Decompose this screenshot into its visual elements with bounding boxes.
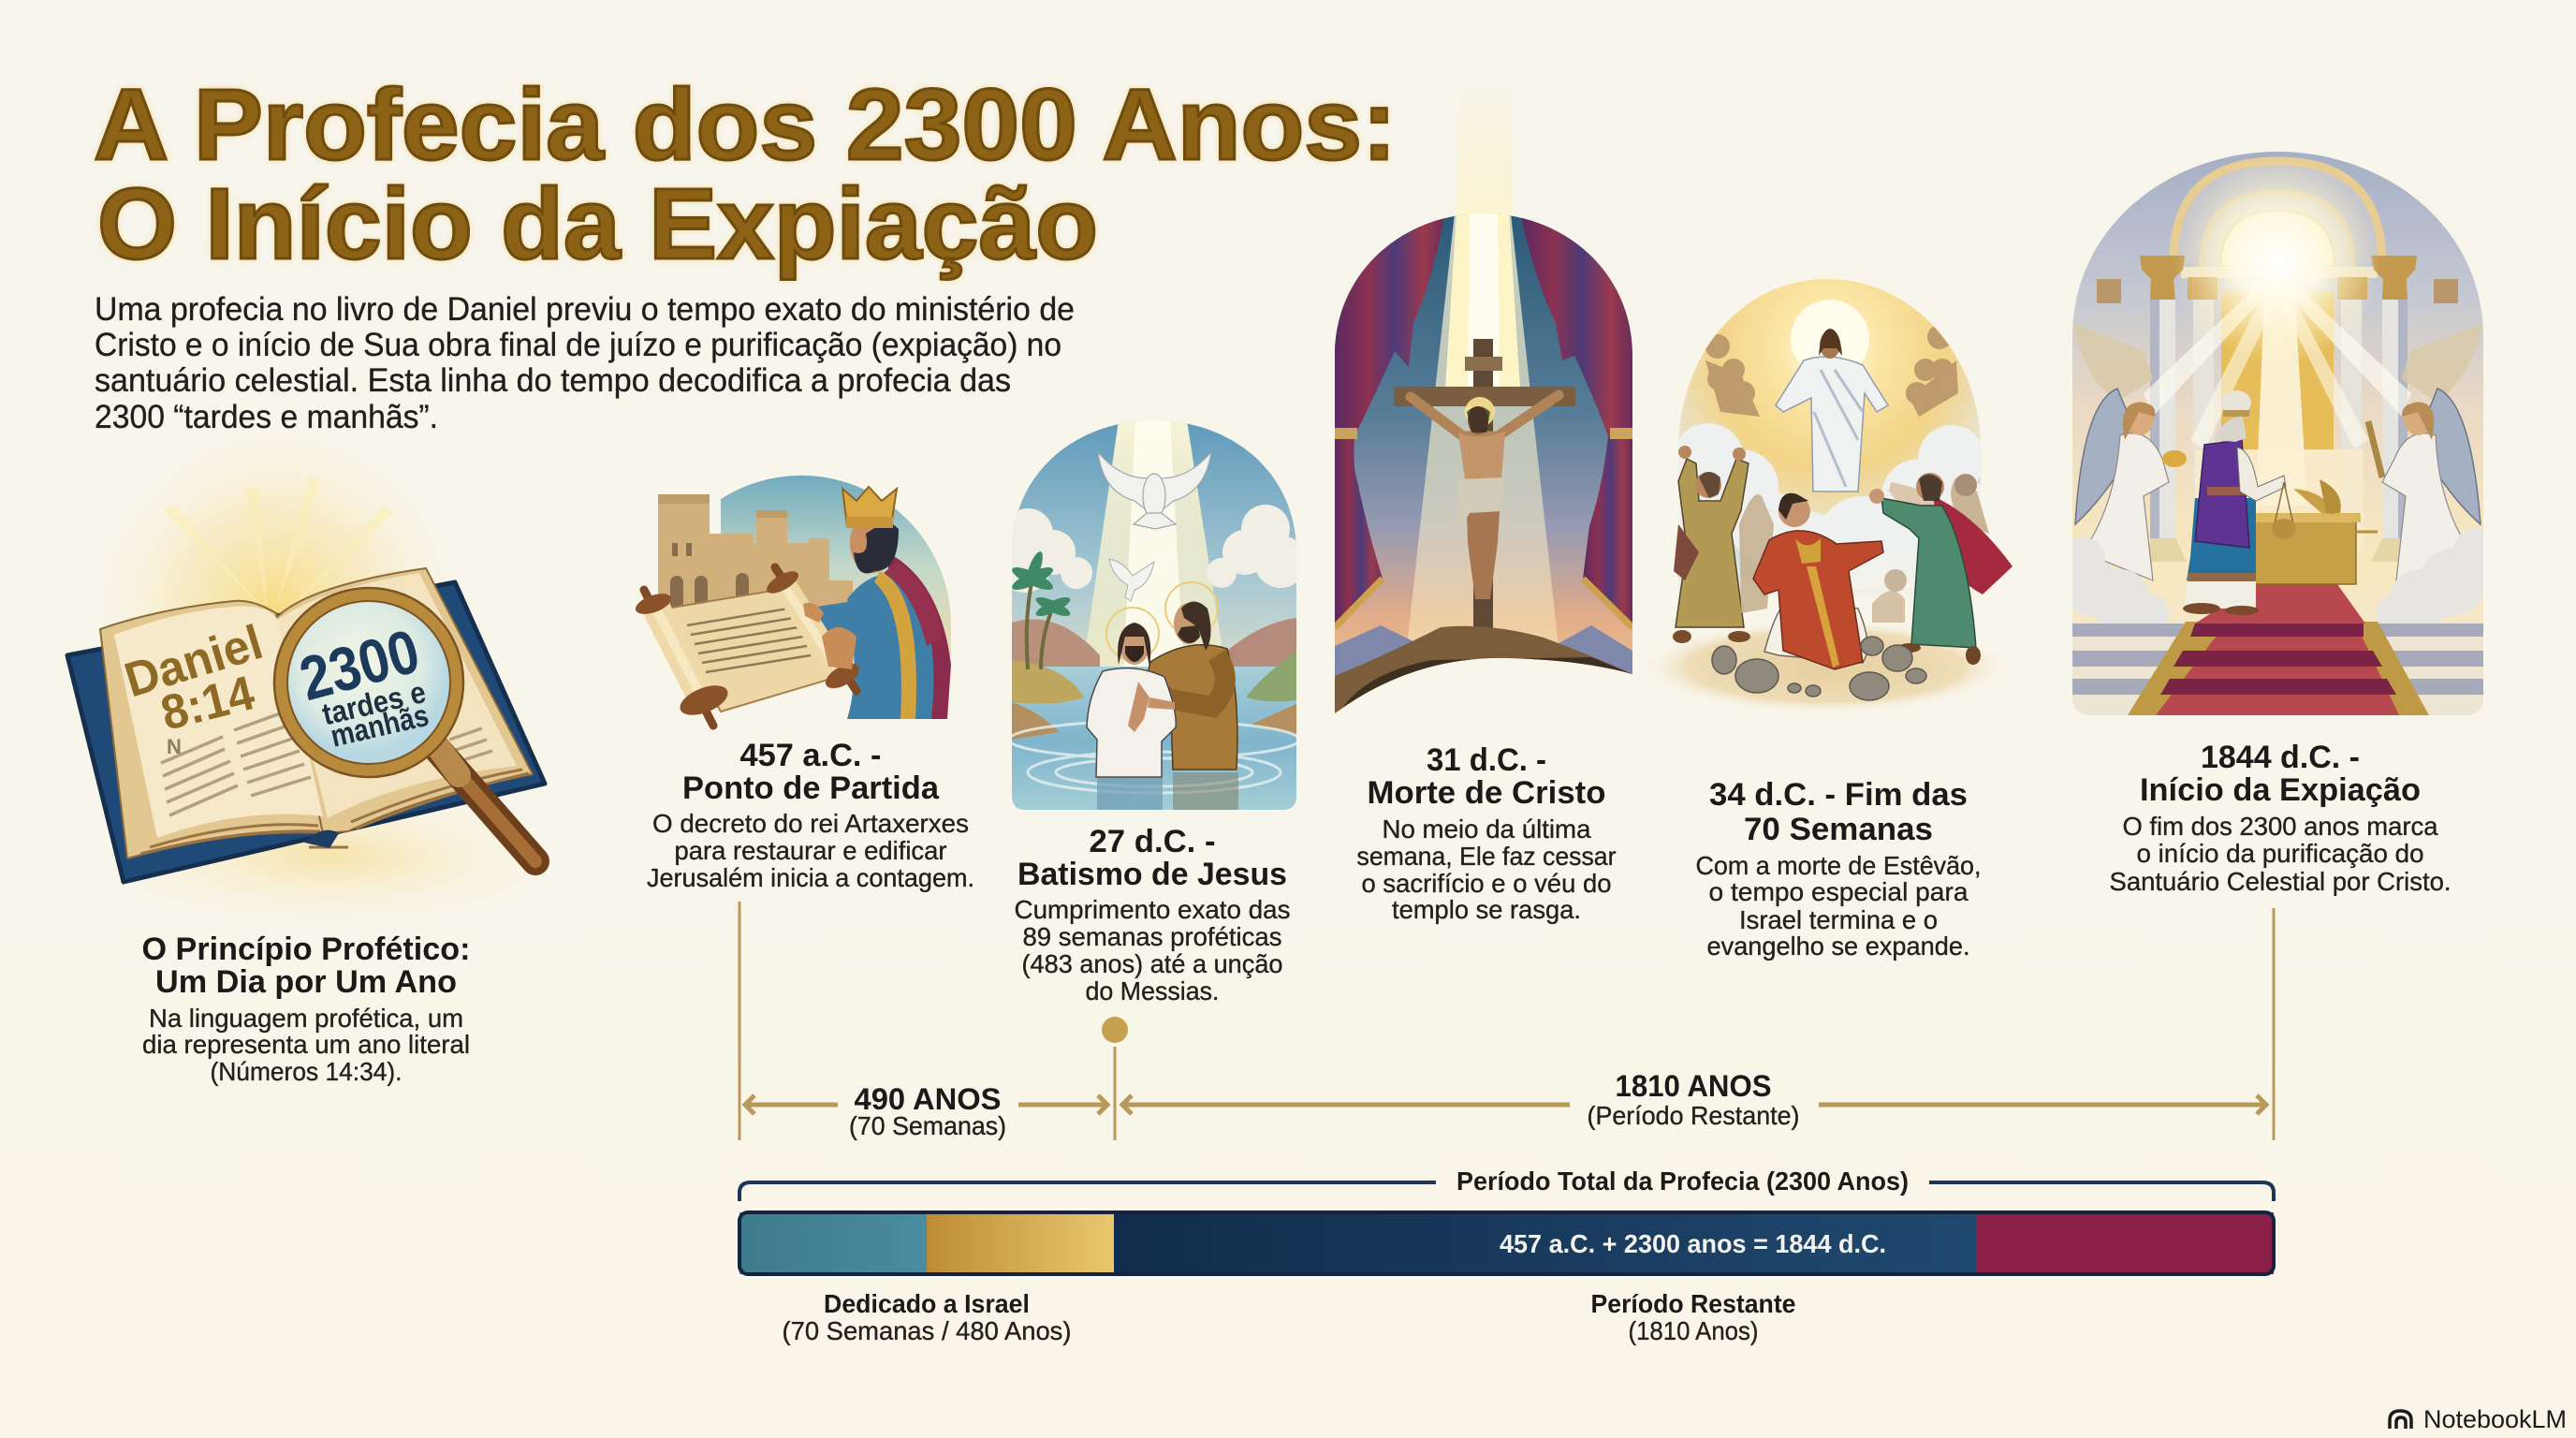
timeline marker: baptism dot and line — [1102, 1017, 1128, 1140]
title: A Profecia dos 2300 Anos: — [94, 67, 1397, 181]
title — [94, 67, 1397, 280]
king figure — [805, 487, 951, 719]
event text: 27 d.C.: do Messias. — [1086, 976, 1219, 1005]
event text: 27 d.C.: 27 d.C. - — [1090, 824, 1215, 859]
illustration: Stephen sees Christ in heaven — [1643, 279, 2012, 713]
event text: 1844 d.C.: O fim dos 2300 anos marca — [2123, 812, 2438, 841]
John the Baptist — [1147, 601, 1237, 770]
bar label: remaining period — [1591, 1289, 1795, 1345]
icon: open book of Daniel with magnifying glass: manhãs — [328, 697, 432, 754]
event text: 457 a.C.: Jerusalém inicia a contagem. — [647, 863, 974, 892]
caption: prophetic principle: O Princípio Profético: — [142, 932, 470, 967]
intro paragraph: Cristo e o início de Sua obra final de juízo e purificação (expiação) no — [95, 327, 1061, 363]
rocks — [1712, 637, 1926, 700]
title: O Início da Expiação — [97, 167, 1098, 280]
event text: 27 d.C.: Cumprimento exato das — [1015, 895, 1290, 924]
event text: 457 a.C.: Ponto de Partida — [682, 770, 940, 806]
caption: prophetic principle: dia representa um ano literal — [142, 1030, 470, 1059]
event text: 27 d.C.: (483 anos) até a unção — [1022, 949, 1282, 978]
event text: 34 d.C.: 34 d.C. - Fim das — [1709, 777, 1968, 813]
event text: 34 d.C.: o tempo especial para — [1709, 877, 1969, 906]
event text: 1844 d.C.: o início da purificação do — [2136, 839, 2424, 868]
icon: open book of Daniel with magnifying glass: 8:14 — [155, 666, 259, 741]
event text: 31 d.C.: 31 d.C. - — [1427, 742, 1546, 778]
left angel — [2075, 389, 2187, 580]
event text: 27 d.C.: Batismo de Jesus — [1017, 857, 1287, 892]
bar label: dedicated to Israel: Dedicado a Israel — [824, 1289, 1030, 1318]
icon: open book of Daniel with magnifying glass: Daniel — [119, 615, 269, 708]
event text: 31 d.C.: No meio da última — [1382, 814, 1591, 844]
icon: open book of Daniel with magnifying glass: tardes e — [319, 674, 429, 731]
Jesus in white robe — [1087, 623, 1176, 777]
stairs — [2072, 584, 2483, 715]
icon: large dove — [1098, 452, 1211, 529]
man raising fists — [1673, 446, 1750, 643]
event text: 457 a.C. — [647, 738, 974, 892]
arrow: 490 years — [745, 1095, 1107, 1114]
event text: 31 d.C.: o sacrifício e o véu do — [1361, 869, 1612, 898]
event text: 27 d.C.: 89 semanas proféticas — [1022, 922, 1282, 951]
illustration: crucifixion — [1335, 213, 1632, 721]
event text: 34 d.C. — [1696, 777, 1981, 961]
event text: 457 a.C.: para restaurar e edificar — [674, 836, 947, 865]
event text: 1844 d.C. — [2110, 740, 2451, 896]
icon: small dove — [1109, 559, 1154, 601]
label: 490 years — [849, 1082, 1006, 1140]
timeline bar: 457 a.C. + 2300 anos = 1844 d.C. — [1500, 1229, 1886, 1258]
bar label: remaining period: Período Restante — [1591, 1289, 1795, 1318]
high priest — [2183, 390, 2296, 615]
man in green robe and red cape — [1869, 473, 2012, 665]
label: 1810 years — [1588, 1069, 1799, 1130]
arrow: 1810 years — [1122, 1095, 2266, 1114]
event text: 34 d.C.: 70 Semanas — [1744, 812, 1933, 847]
label: 1810 years: 1810 ANOS — [1616, 1069, 1771, 1103]
crucified Christ — [1411, 395, 1559, 599]
event text: 27 d.C. — [1015, 824, 1290, 1005]
light beam above the cross — [1456, 84, 1512, 215]
intro paragraph: santuário celestial. Esta linha do tempo decodifica a profecia das — [95, 362, 1011, 399]
clouds — [2072, 528, 2483, 623]
timeline marker: start line — [738, 902, 741, 1140]
label: 490 years: (70 Semanas) — [849, 1111, 1006, 1140]
caption: prophetic principle — [142, 932, 470, 1086]
event text: 34 d.C.: Israel termina e o — [1739, 905, 1938, 934]
icon: open book of Daniel with magnifying glass — [67, 431, 552, 922]
Stephen kneeling — [1753, 493, 1883, 669]
illustration: king Artaxerxes with decree scroll — [633, 473, 955, 726]
event text: 31 d.C. — [1357, 742, 1616, 924]
intro paragraph: 2300 “tardes e manhãs”. — [95, 399, 438, 435]
icon: open book of Daniel with magnifying glass: N — [167, 735, 182, 758]
event text: 31 d.C.: templo se rasga. — [1392, 895, 1581, 924]
event text: 34 d.C.: evangelho se expande. — [1707, 932, 1969, 961]
event text: 1844 d.C.: 1844 d.C. - — [2201, 740, 2360, 775]
caption: prophetic principle: (Números 14:34). — [210, 1057, 402, 1086]
icon: open book of Daniel with magnifying glass: 2300 — [293, 615, 426, 713]
bar label: dedicated to Israel: (70 Semanas / 480 Anos) — [783, 1316, 1071, 1345]
illustration: baptism of Jesus — [999, 420, 1307, 816]
ark of the covenant — [2248, 479, 2378, 584]
risen Christ — [1776, 329, 1888, 492]
event text: 34 d.C.: Com a morte de Estêvão, — [1696, 851, 1981, 880]
caption: prophetic principle: Um Dia por Um Ano — [155, 964, 457, 1000]
label: 490 years: 490 ANOS — [854, 1082, 1002, 1116]
event text: 457 a.C.: 457 a.C. - — [739, 738, 882, 773]
illustration: heavenly sanctuary — [2060, 152, 2498, 715]
event text: 31 d.C.: semana, Ele faz cessar — [1357, 842, 1616, 871]
total period bracket: Período Total da Profecia (2300 Anos) — [1456, 1167, 1909, 1196]
right angel — [2368, 389, 2481, 580]
intro paragraph — [95, 291, 1075, 435]
caption: prophetic principle: Na linguagem profética, um — [149, 1004, 463, 1033]
event text: 457 a.C.: O decreto do rei Artaxerxes — [652, 809, 969, 838]
label: 1810 years: (Período Restante) — [1588, 1101, 1799, 1130]
bar label: remaining period: (1810 Anos) — [1629, 1316, 1758, 1345]
event text: 31 d.C.: Morte de Cristo — [1367, 775, 1606, 811]
intro paragraph: Uma profecia no livro de Daniel previu o tempo exato do ministério de — [95, 291, 1075, 328]
timeline marker: end line — [2273, 908, 2275, 1140]
decree scroll — [633, 567, 863, 726]
event text: 1844 d.C.: Início da Expiação — [2140, 772, 2421, 808]
NotebookLM logo: NotebookLM — [2423, 1405, 2567, 1433]
total period bracket — [739, 1167, 2274, 1201]
timeline bar — [736, 1208, 2277, 1279]
bar label: dedicated to Israel — [783, 1289, 1071, 1345]
event text: 1844 d.C.: Santuário Celestial por Cristo. — [2110, 867, 2451, 896]
